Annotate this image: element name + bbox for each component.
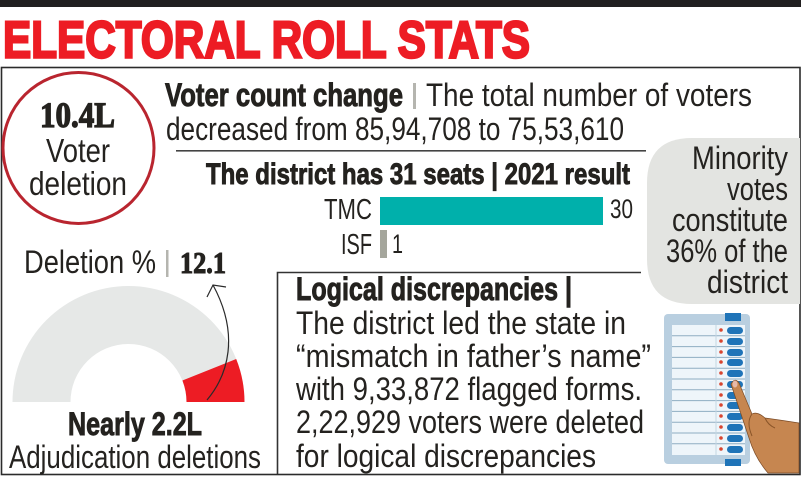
panel: minority votes: Minority: [692, 140, 788, 176]
panel: logical discrepancies: for logical discrepancies: [296, 438, 596, 474]
TMC bar: [324, 194, 633, 226]
circle callout: voter deletion: 10.4L: [40, 95, 115, 135]
panel: minority votes: district: [707, 264, 788, 300]
panel: logical discrepancies: Logical discrepancies |: [296, 271, 572, 307]
panel: logical discrepancies: “mismatch in father’s name”: [296, 338, 651, 374]
circle callout: voter deletion: Voter: [46, 132, 110, 169]
TMC bar: 30: [610, 194, 633, 224]
deletion percentage label: Deletion %: [24, 244, 156, 280]
voter count change text: The total number of voters: [426, 77, 752, 113]
panel: logical discrepancies: The district led the state in: [296, 305, 626, 341]
arrow: gauge to deletion percentage: [207, 285, 229, 400]
title: ELECTORAL ROLL STATS: [3, 12, 530, 70]
panel: logical discrepancies: [278, 271, 651, 474]
adjudication deletions text: [9, 406, 261, 475]
panel: logical discrepancies: 2,22,929 voters were deleted: [296, 404, 644, 440]
ISF bar: 1: [392, 229, 403, 259]
chart heading: The district has 31 seats | 2021 result: [206, 158, 630, 191]
adjudication deletions text: Adjudication deletions: [9, 439, 261, 475]
bar chart: 2021 result: [206, 158, 633, 261]
voter count change text: [165, 77, 752, 147]
icon: voting machine with hand: [664, 313, 799, 473]
adjudication deletions text: Nearly 2.2L: [68, 406, 202, 442]
TMC bar: TMC: [324, 194, 372, 226]
ISF bar: ISF: [341, 229, 372, 261]
deletion percentage label: 12.1: [180, 245, 226, 280]
gauge chart: [12, 286, 244, 402]
voter count change text: Voter count change: [165, 77, 403, 113]
top black bar: [0, 0, 801, 7]
voter count change text: decreased from 85,94,708 to 75,53,610: [166, 111, 624, 147]
circle callout: voter deletion: deletion: [29, 165, 127, 202]
panel: logical discrepancies: with 9,33,872 flagged forms.: [295, 371, 642, 407]
panel: minority votes: [647, 138, 800, 304]
circle callout: voter deletion: [3, 72, 154, 224]
